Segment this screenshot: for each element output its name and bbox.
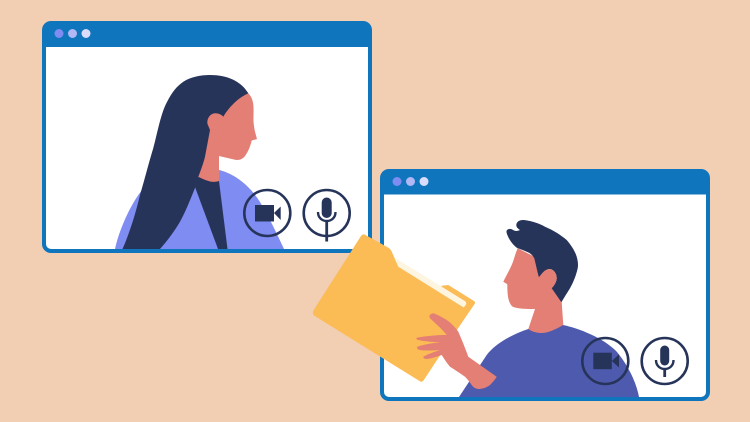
man's face and neck [503,248,563,333]
folder back flap [430,285,475,340]
window control dots [392,177,428,186]
woman's face and neck [198,93,257,182]
icon: camera button [582,338,628,384]
icon: microphone button [642,338,688,384]
window frame [42,21,372,253]
folder front [313,234,470,382]
panel: man's video window [380,169,710,401]
window frame [380,169,710,401]
window control dots [54,29,90,38]
woman figure [115,75,284,249]
man figure [459,220,639,397]
window content area [384,194,706,397]
icon: microphone button [304,190,350,242]
icon: yellow folder [313,234,475,382]
woman's dark inner shirt [195,177,228,249]
icon: camera button [244,190,290,236]
woman's top [115,170,284,249]
window content area [46,47,368,249]
man's hand and forearm [416,313,497,389]
man's ear [539,269,557,288]
man's shirt [459,325,639,397]
paper strip inside folder [396,258,466,308]
woman's long hair [122,75,248,249]
man's hair [506,220,578,302]
panel: woman's video window [42,21,372,253]
